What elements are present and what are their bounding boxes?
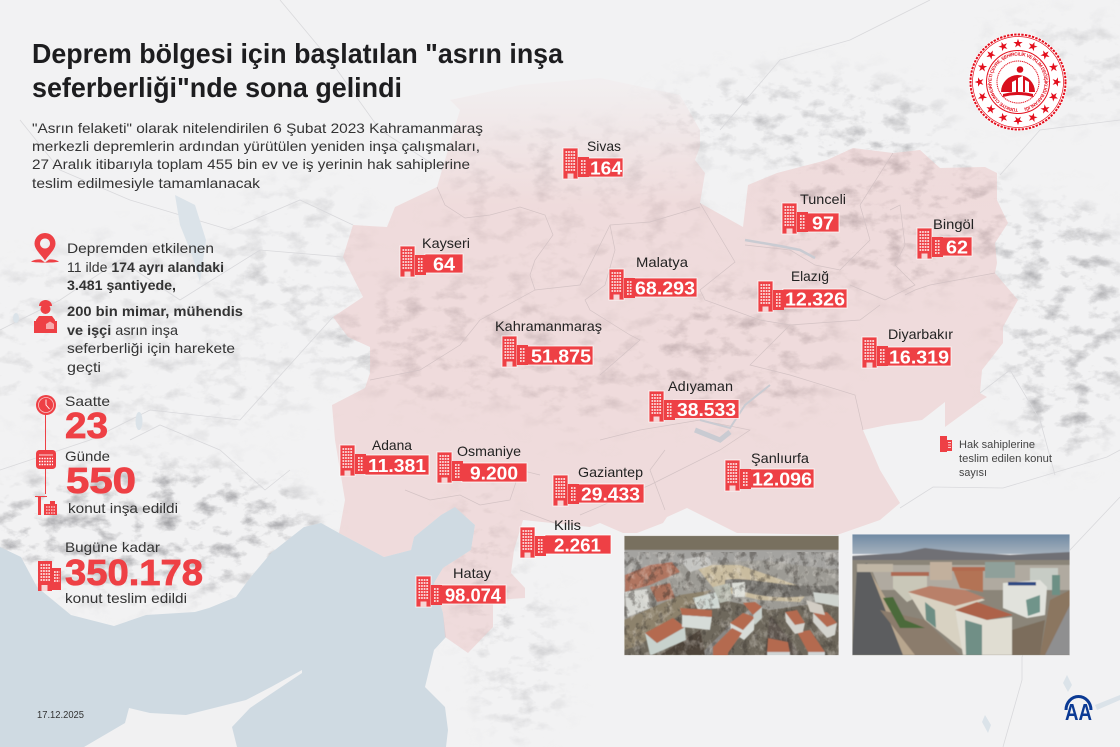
left column: pace timeline: 23 [65, 405, 108, 446]
label: Osmaniye: 9.200 [470, 462, 518, 484]
label: Adana: Adana [372, 437, 412, 453]
title: Deprem bölgesi için başlatılan "asrın inşa [32, 38, 564, 69]
icon: clock [36, 395, 56, 415]
label: Adıyaman [649, 378, 739, 422]
label: Adana [340, 437, 429, 476]
label: Kilis [520, 517, 611, 558]
label: Malatya [609, 254, 697, 300]
map legend: Hak sahiplerine [959, 439, 1035, 451]
icon: legend building [940, 436, 952, 452]
ministry emblem [969, 33, 1067, 131]
left column: pace timeline: Günde [65, 448, 110, 464]
left column: workers: seferberliği için harekete [67, 340, 235, 356]
icon: building [38, 561, 61, 591]
left column: delivered total [38, 539, 203, 606]
label: Şanlıurfa [725, 450, 814, 491]
label: Tunceli [782, 191, 846, 234]
label: Hatay [416, 565, 506, 607]
label: Gaziantep [553, 464, 644, 506]
photo: aerial view of new housing [624, 536, 839, 656]
label: Bingöl: 62 [946, 236, 968, 258]
left column: affected area [31, 233, 224, 293]
label: Diyarbakır: 16.319 [889, 346, 949, 368]
label: Kayseri [400, 235, 470, 277]
label: Kilis: 2.261 [554, 534, 601, 556]
label: Şanlıurfa: Şanlıurfa [751, 450, 809, 466]
label: Sivas: 164 [590, 158, 623, 178]
icon: worker with parcel [34, 300, 57, 333]
label: Elazığ: Elazığ [791, 268, 829, 284]
intro text: "Asrın felaketi" olarak nitelendirilen 6 Şubat 2023 Kahramanmaraş [32, 120, 483, 136]
label: Bingöl [917, 216, 974, 259]
left column: pace timeline [35, 393, 178, 516]
sea and Mediterranean coastline [0, 507, 475, 747]
label: Diyarbakır [862, 326, 953, 368]
province borders [370, 153, 995, 525]
icon: location pin [31, 233, 59, 263]
map legend: sayısı [959, 467, 987, 479]
intro text: teslim edilmesiyle tamamlanacak [32, 175, 261, 191]
label: Tunceli: 97 [812, 212, 834, 234]
dam lakes [695, 240, 815, 440]
left column: delivered total: 350.178 [65, 552, 203, 593]
label: Gaziantep: 29.433 [581, 484, 640, 504]
intro text [32, 120, 483, 191]
icon: crane and buildings [35, 496, 57, 515]
label: Malatya: Malatya [636, 254, 688, 270]
label: Osmaniye: Osmaniye [457, 443, 521, 459]
left column: pace timeline: konut inşa edildi [68, 500, 178, 516]
icon: connector line [44, 414, 46, 494]
left column: pace timeline: 550 [66, 460, 136, 501]
Cyprus land [84, 670, 302, 747]
left column: workers: geçti [67, 359, 101, 375]
left column: pace timeline: Saatte [65, 393, 110, 409]
icon: calendar [36, 450, 56, 469]
ministry emblem: TÜRKİYE CUMHURİYETİ ÇEVRE, ŞEHİRCİLİK VE İKLİM DEĞİŞİKLİĞİ BAKANLIĞI [988, 52, 1048, 112]
left column: delivered total: Bugüne kadar [65, 539, 160, 555]
label: Adıyaman: Adıyaman [668, 378, 733, 394]
title [32, 38, 564, 103]
label: Gaziantep: Gaziantep [578, 464, 643, 480]
label: Şanlıurfa: 12.096 [752, 468, 812, 490]
label: Kahramanmaraş: 51.875 [531, 346, 591, 366]
title: seferberliği"nde sona gelindi [32, 72, 402, 103]
label: Kayseri: 64 [433, 254, 456, 274]
label: Malatya: 68.293 [635, 278, 695, 298]
left column: affected area: 3.481 şantiyede, [67, 277, 176, 293]
label: Kahramanmaraş [495, 318, 602, 367]
intro text: 27 Aralık itibarıyla toplam 455 bin ev ve iş yerinin hak sahiplerine [32, 156, 470, 172]
map legend [940, 436, 1052, 479]
label: Tunceli: Tunceli [800, 191, 846, 207]
label: Sivas [563, 138, 623, 179]
label: Adana: 11.381 [368, 455, 426, 476]
label: Adıyaman: 38.533 [677, 399, 736, 420]
left column: delivered total: konut teslim edildi [65, 590, 187, 606]
label: Hatay: Hatay [453, 565, 491, 581]
label: Hatay: 98.074 [445, 584, 502, 606]
label: Kahramanmaraş: Kahramanmaraş [495, 318, 602, 334]
intro text: merkezli depremlerin ardından yürütülen yeniden inşa çalışmaları, [32, 138, 480, 154]
label: Bingöl: Bingöl [933, 216, 974, 232]
map: lakes [13, 195, 1120, 733]
label: Kayseri: Kayseri [422, 235, 470, 251]
left column: affected area: 11 ilde 174 ayrı alandaki [67, 259, 224, 275]
left column: affected area: Depremden etkilenen [67, 240, 214, 256]
label: Osmaniye [437, 443, 527, 484]
label: Sivas: Sivas [587, 138, 621, 154]
map legend: teslim edilen konut [959, 453, 1052, 465]
label: Elazığ [758, 268, 847, 312]
Anadolu Agency logo: AA [1065, 699, 1092, 725]
photo: housing blocks beside a road [852, 534, 1070, 656]
left column: workers [34, 300, 243, 375]
date: 17.12.2025 [37, 710, 84, 721]
left column: workers: ve işçi asrın inşa [67, 322, 178, 338]
label: Elazığ: 12.326 [785, 288, 845, 310]
left column: workers: 200 bin mimar, mühendis [67, 303, 243, 319]
label: Diyarbakır: Diyarbakır [888, 326, 953, 342]
earthquake region highlighted in pink [332, 78, 1018, 653]
label: Kilis: Kilis [554, 517, 581, 533]
